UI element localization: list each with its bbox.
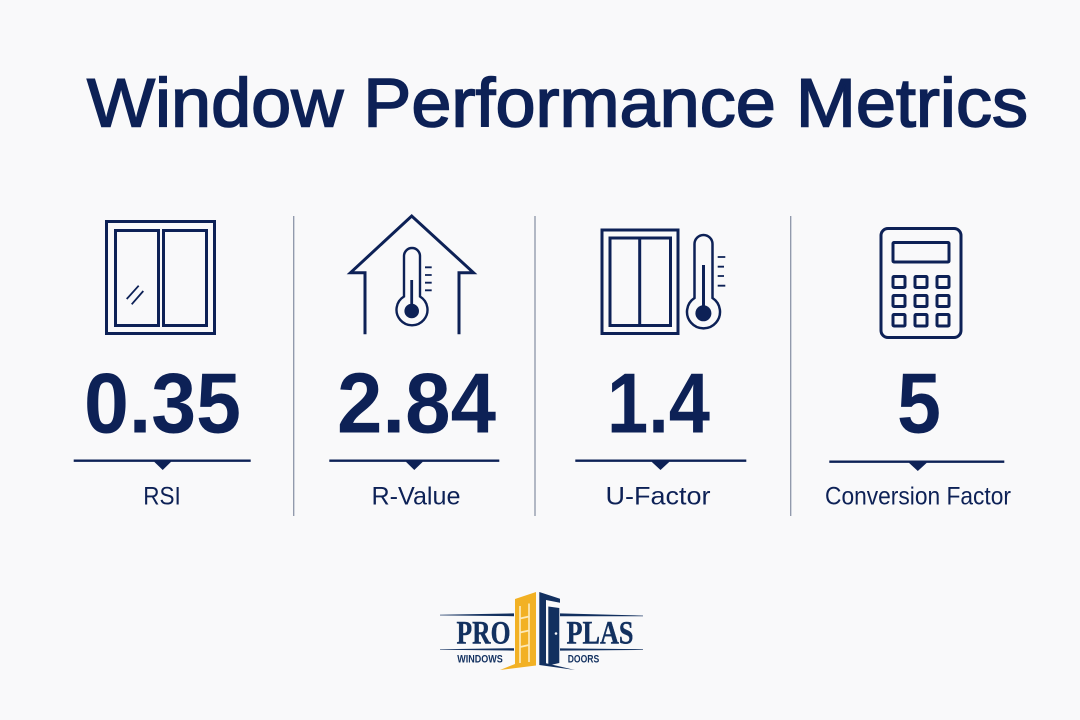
pointer rule bbox=[575, 460, 746, 470]
pointer rule bbox=[329, 460, 499, 470]
logo wordmark: WINDOWS: WINDOWS bbox=[457, 653, 503, 665]
icon: sliding window bbox=[106, 222, 214, 334]
metric value: U-Factor: 1.4 bbox=[607, 356, 710, 452]
metric label: Conversion Factor: Conversion Factor bbox=[825, 482, 1011, 510]
logo wordmark: PLAS: PLAS bbox=[566, 616, 634, 652]
logo: yellow window bbox=[500, 592, 536, 670]
metric label: R-Value: R-Value bbox=[372, 482, 460, 510]
metric label: RSI: RSI bbox=[143, 482, 181, 510]
panel: R-Value bbox=[329, 216, 499, 510]
icon: house with thermometer bbox=[350, 216, 474, 334]
metric value: RSI: 0.35 bbox=[84, 356, 241, 452]
pointer rule bbox=[74, 460, 251, 470]
metric value: R-Value: 2.84 bbox=[337, 356, 496, 452]
pointer rule bbox=[829, 460, 1004, 471]
logo: blue door bbox=[539, 592, 575, 670]
panel: RSI bbox=[74, 222, 251, 510]
logo: Pro Plas Windows Doors bbox=[440, 592, 643, 670]
panel: U-Factor bbox=[575, 230, 746, 510]
metric label: U-Factor: U-Factor bbox=[606, 482, 710, 510]
metric value: Conversion Factor: 5 bbox=[897, 356, 941, 452]
title: Window Performance Metrics bbox=[87, 64, 1028, 142]
panel: Conversion Factor bbox=[825, 228, 1011, 510]
icon: window with thermometer bbox=[602, 230, 725, 334]
logo wordmark: PRO: PRO bbox=[456, 616, 510, 652]
logo wordmark: DOORS: DOORS bbox=[568, 653, 599, 665]
icon: calculator bbox=[881, 228, 961, 338]
